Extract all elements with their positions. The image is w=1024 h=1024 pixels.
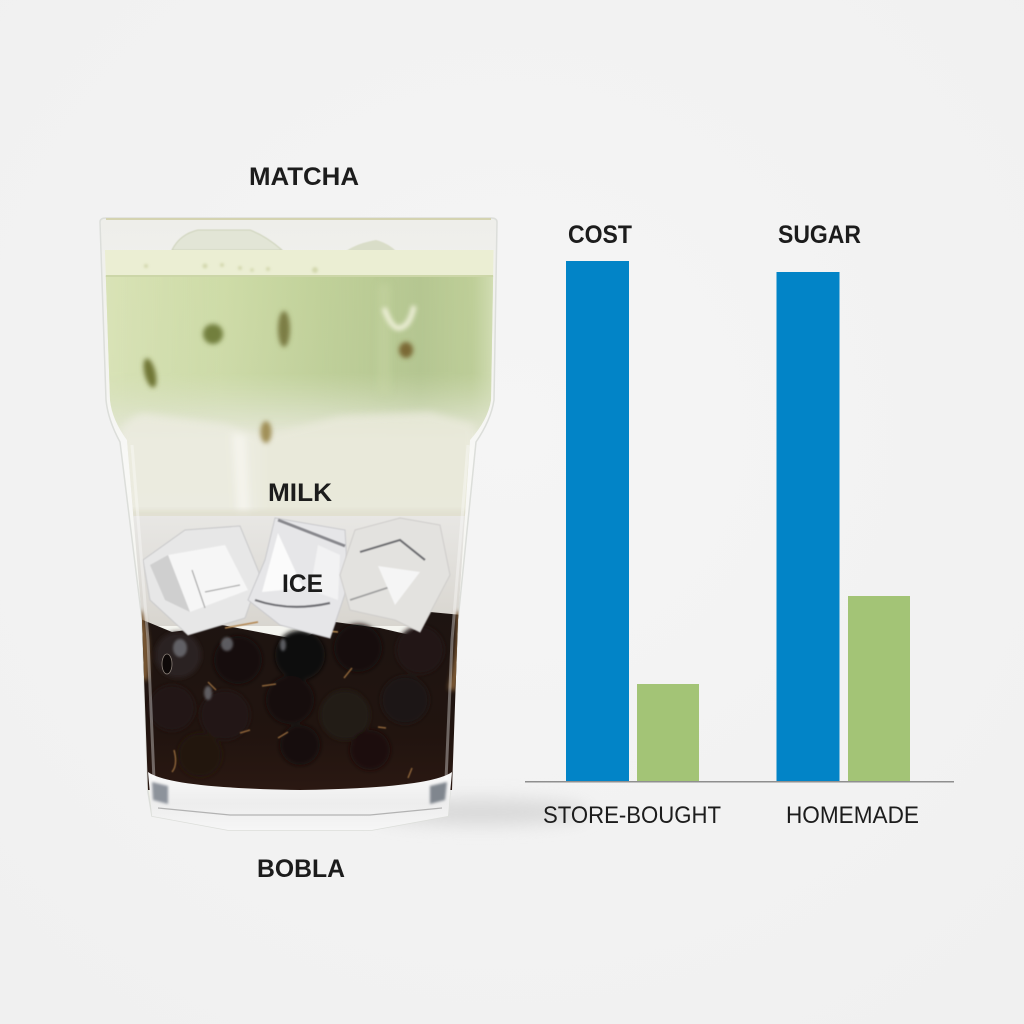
pearl reflections (173, 637, 286, 700)
foam bubbles (144, 263, 318, 273)
axis label: store-bought: STORE-BOUGHT (543, 802, 721, 829)
bar: cost store-bought (566, 261, 629, 781)
ice cube right (340, 518, 450, 632)
heading: cost: COST (568, 221, 632, 249)
glass shadow (370, 799, 590, 825)
label: boba: BOBLA (257, 855, 345, 883)
top ice cubes (172, 230, 396, 251)
label: matcha: MATCHA (249, 163, 359, 191)
milk to ice shadow (133, 509, 465, 516)
label: ice: ICE (282, 570, 323, 598)
glass base (148, 772, 452, 830)
matcha and milk liquid (106, 276, 494, 450)
bar chart (525, 221, 954, 829)
bar: sugar store-bought (776, 272, 840, 781)
ice cube left (143, 526, 260, 635)
matcha clumps (141, 306, 414, 443)
foam layer (100, 250, 500, 275)
matcha side shading (106, 277, 493, 418)
ice cube center (248, 518, 348, 638)
pearl dimple (162, 654, 172, 674)
syrup highlights (172, 622, 412, 778)
ice layer (120, 516, 480, 626)
rim highlight (106, 218, 491, 220)
label: milk: MILK (268, 479, 332, 507)
axis label: homemade: HOMEMADE (786, 802, 919, 829)
boba pearls (154, 620, 415, 770)
syrup edge (138, 612, 460, 690)
glass body (100, 218, 497, 830)
heading: sugar: SUGAR (778, 221, 861, 249)
boba layer (138, 612, 462, 790)
glass edge reflections (132, 445, 468, 780)
base corner reflections (152, 782, 447, 804)
glass facet panels (124, 410, 471, 509)
ice cubes over the boba (143, 518, 450, 638)
bar: cost homemade (637, 684, 699, 781)
illustration: layered matcha boba drink in a glass (100, 218, 500, 830)
bar: sugar homemade (848, 596, 910, 781)
baseline (525, 781, 954, 782)
